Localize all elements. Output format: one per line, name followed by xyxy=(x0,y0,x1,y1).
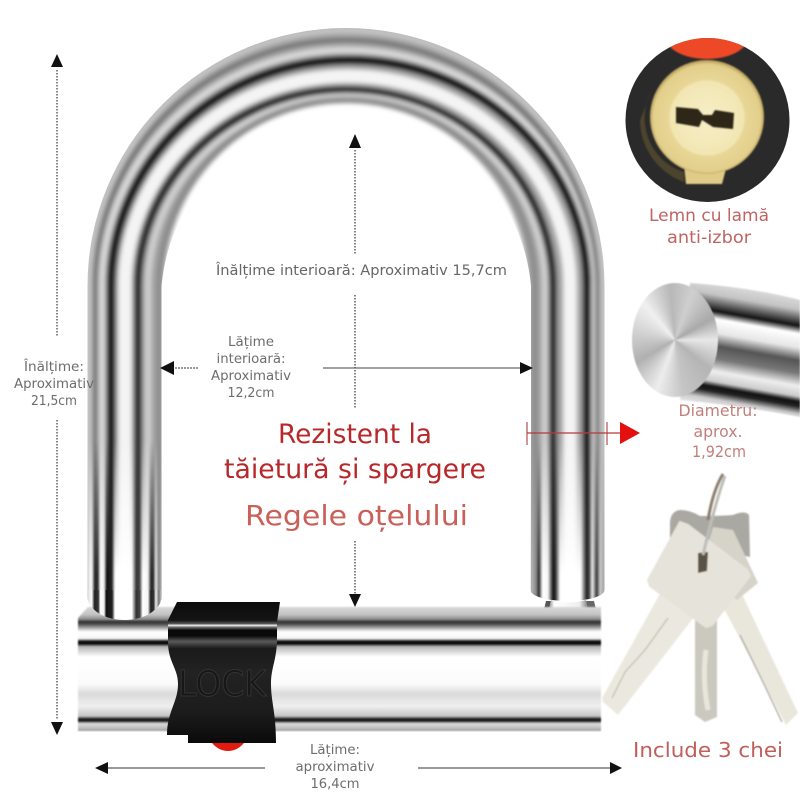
headline: cut and break resistant: tăietură și spargere xyxy=(224,454,486,485)
label: overall height: 21,5cm xyxy=(31,393,77,409)
key ring inner xyxy=(703,476,725,555)
lock base collar under right leg xyxy=(529,600,599,622)
black sleeve with LOCK emboss xyxy=(167,602,280,743)
inset: three keys xyxy=(602,474,798,725)
label: overall height: Aproximativ xyxy=(14,376,94,392)
label: inner width: interioară: xyxy=(216,351,286,367)
gold cylinder xyxy=(650,60,764,184)
label: inner width: Lățime xyxy=(228,334,274,350)
caption: diameter: Diametru: xyxy=(678,401,758,420)
back key head xyxy=(670,510,750,557)
caption: diameter xyxy=(678,401,758,461)
caption: key cylinder: anti-izbor xyxy=(667,228,751,248)
label: overall width: aproximativ xyxy=(296,759,375,775)
label: inner width xyxy=(211,334,291,401)
left shackle end over crossbar xyxy=(88,590,161,620)
middle key blade xyxy=(695,600,717,722)
inset: steel rod body xyxy=(680,283,800,417)
keyway xyxy=(676,107,734,129)
dimension: bar diameter marker xyxy=(527,422,640,445)
caption: key cylinder xyxy=(649,206,769,248)
LOCK embossed text: LOCK xyxy=(178,664,267,705)
subheadline: king of steel: Regele oțelului xyxy=(245,499,468,532)
inset: key cylinder xyxy=(626,38,790,202)
headline: cut and break resistant: Rezistent la xyxy=(278,419,432,450)
caption: three keys: Include 3 chei xyxy=(633,738,783,762)
headline: cut and break resistant xyxy=(224,419,486,485)
key hole xyxy=(698,552,708,573)
red button under sleeve xyxy=(212,743,244,751)
shackle: U-shaped steel bar xyxy=(88,30,604,640)
left key groove xyxy=(612,618,668,698)
label: inner height: Înălțime interioară: Aproximativ 15,7cm xyxy=(215,261,507,279)
label: overall height xyxy=(14,357,94,409)
front key head xyxy=(648,522,750,627)
right key blade xyxy=(722,590,798,725)
label: inner width: Aproximativ xyxy=(211,368,291,384)
label: overall width: Lățime: xyxy=(310,742,360,758)
caption: diameter: aprox. xyxy=(694,422,742,441)
second key head xyxy=(700,527,758,600)
middle key groove xyxy=(704,650,708,710)
dimension: inner width xyxy=(160,361,533,375)
left key blade xyxy=(602,590,698,715)
key ring outer xyxy=(708,474,723,520)
dimension: inner height xyxy=(349,134,361,607)
lock crossbar xyxy=(78,607,601,731)
label: inner width: 12,2cm xyxy=(228,385,274,401)
caption: key cylinder: Lemn cu lamă xyxy=(649,206,769,226)
label: overall width: 16,4cm xyxy=(310,776,360,792)
dimension: overall width xyxy=(95,762,622,774)
inset: rod end disc xyxy=(632,283,718,397)
label: overall height: Înălțime: xyxy=(23,357,84,375)
right key groove xyxy=(740,635,782,722)
caption: diameter: 1,92cm xyxy=(692,442,746,461)
dimension: overall height xyxy=(51,54,63,735)
label: overall width xyxy=(296,742,375,792)
